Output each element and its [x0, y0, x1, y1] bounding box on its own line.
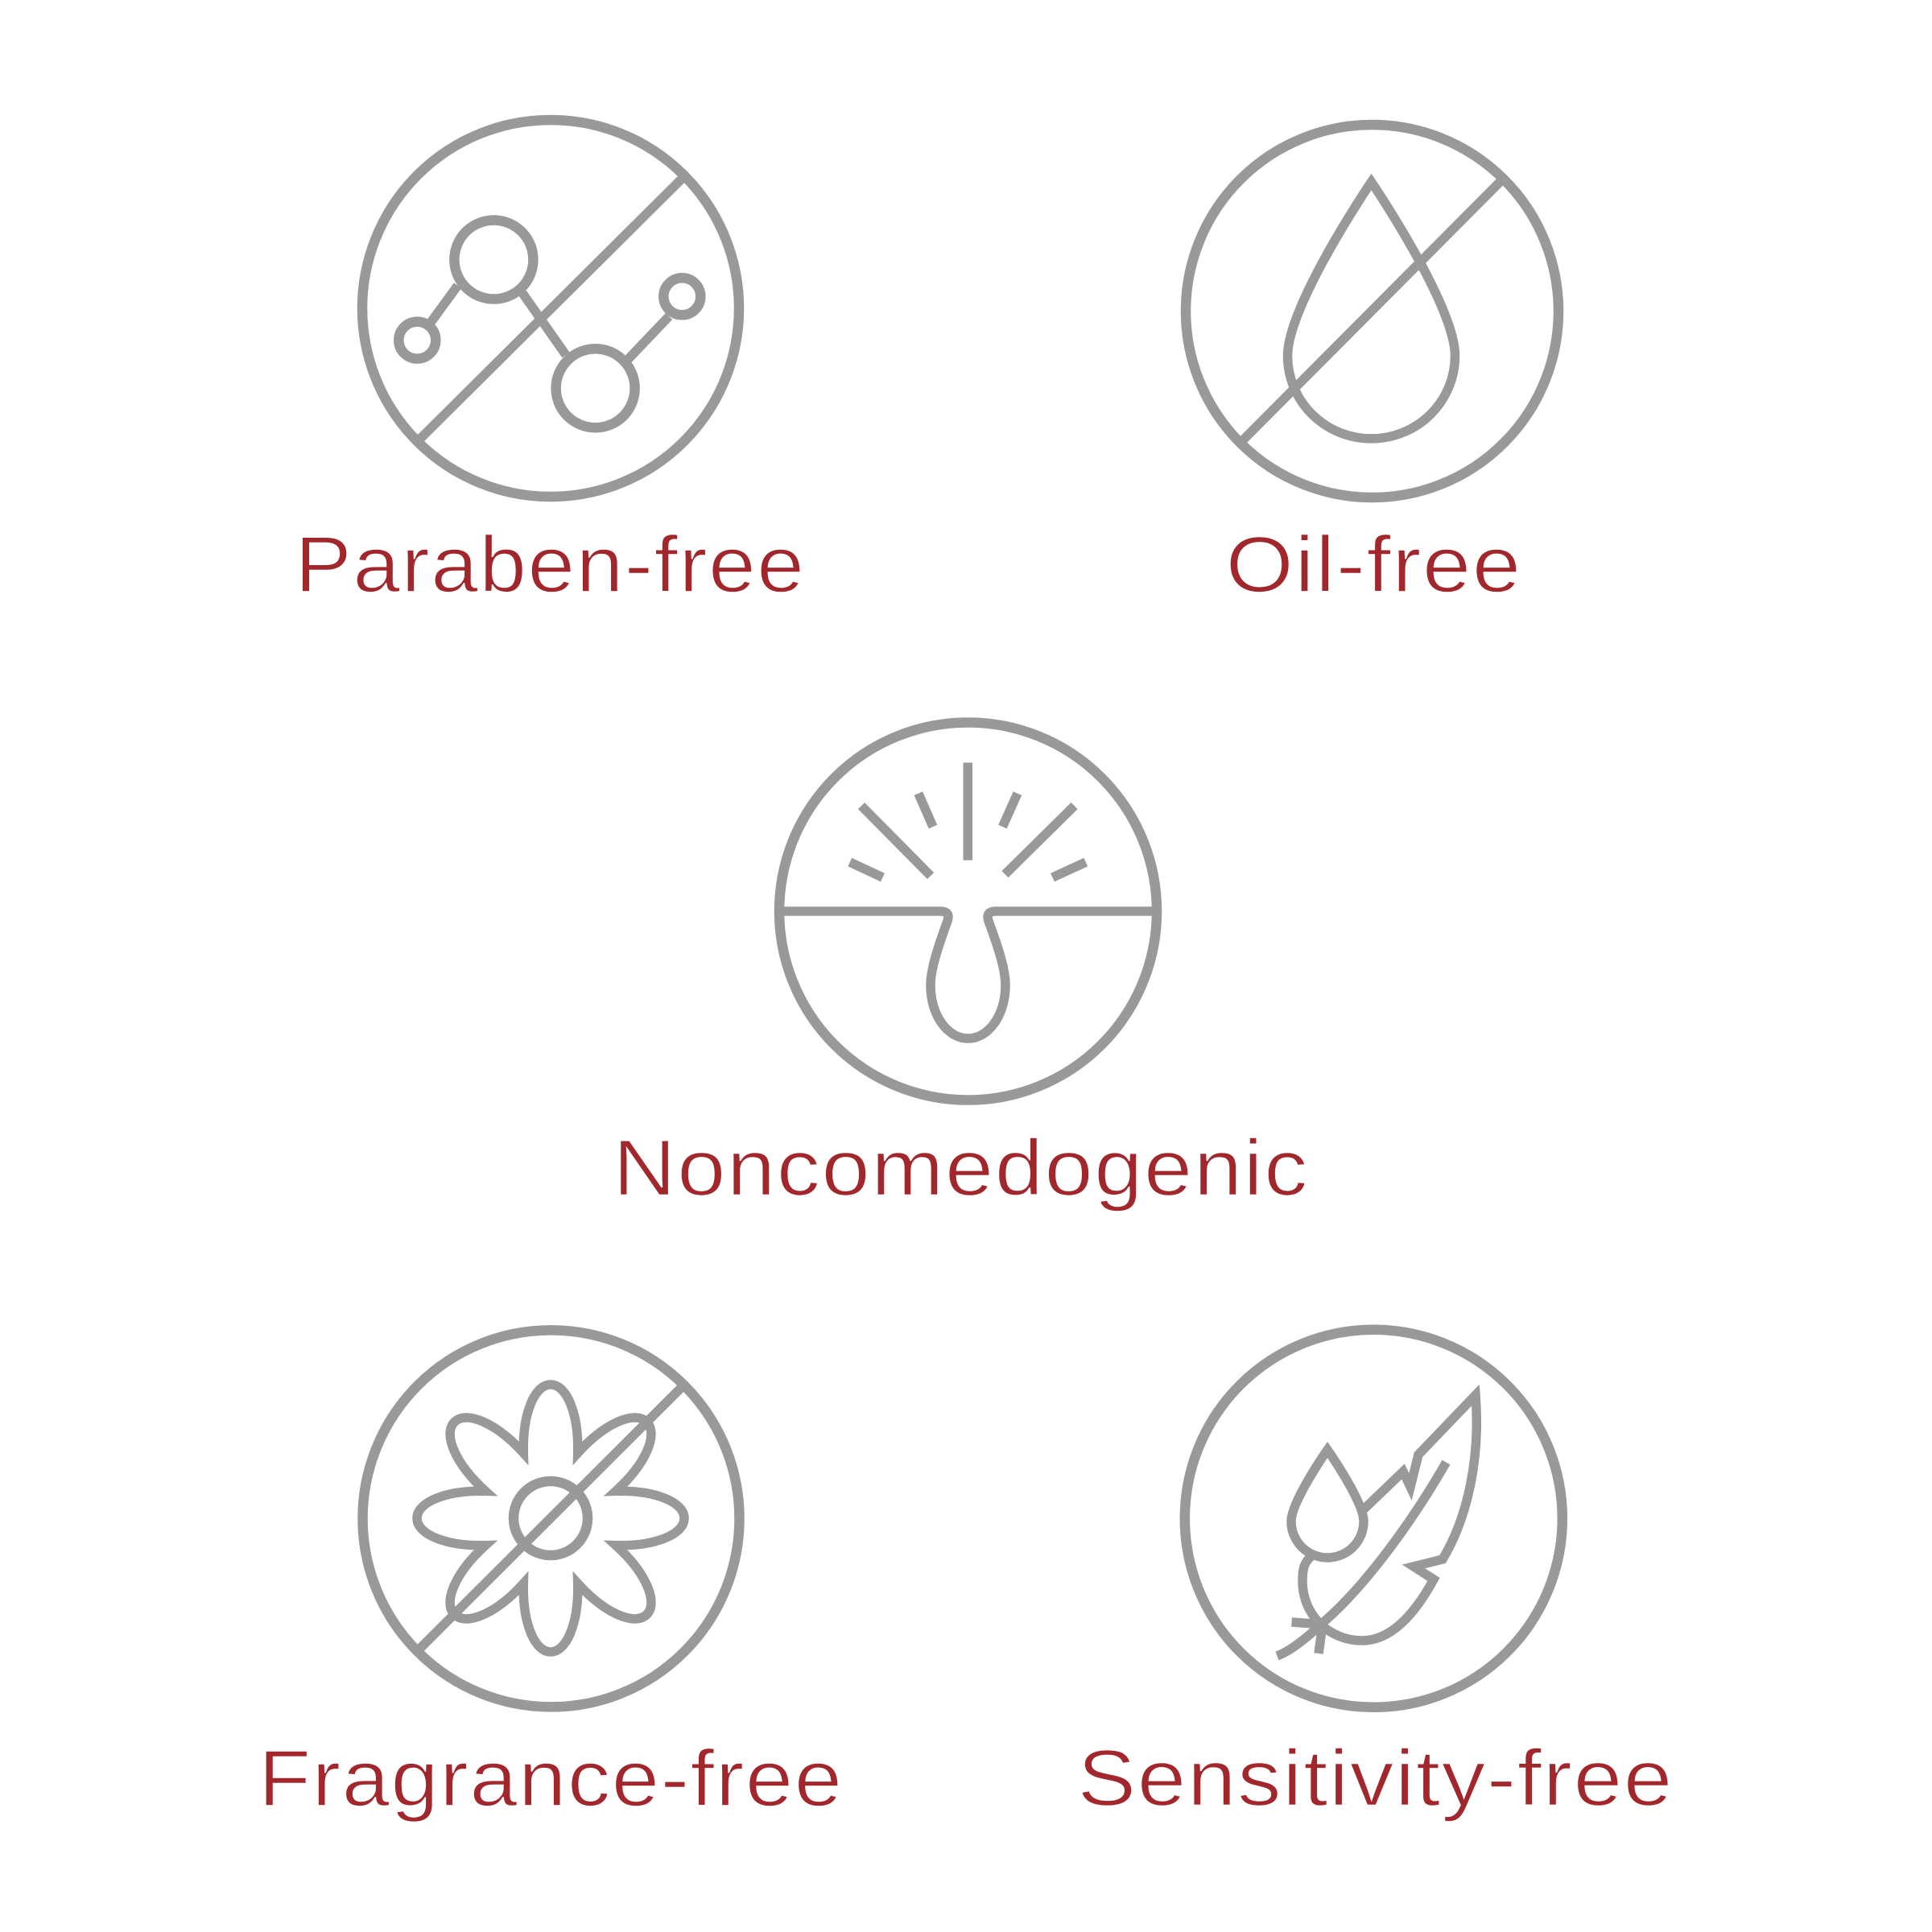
- label: Paraben-free: Paraben-free: [295, 520, 805, 609]
- label: Sensitivity-free: Sensitivity-free: [1077, 1734, 1674, 1823]
- label: Oil-free: Oil-free: [1226, 520, 1522, 609]
- panel: paraben-free: [295, 120, 805, 609]
- panel: fragrance-free: [258, 1330, 844, 1823]
- panel: noncomedogenic: [613, 723, 1309, 1212]
- label: Fragrance-free: Fragrance-free: [258, 1734, 844, 1823]
- icon: flower crossed out: [362, 1330, 739, 1707]
- icon: open pore with rays: [779, 723, 1157, 1100]
- panel: sensitivity-free: [1077, 1330, 1674, 1823]
- icon: drop and feather: [1185, 1330, 1563, 1707]
- panel: oil-free: [1186, 125, 1558, 609]
- icon: oil drop crossed out: [1186, 125, 1558, 497]
- label: Noncomedogenic: Noncomedogenic: [613, 1124, 1309, 1212]
- icon: paraben molecule crossed out: [362, 120, 739, 497]
